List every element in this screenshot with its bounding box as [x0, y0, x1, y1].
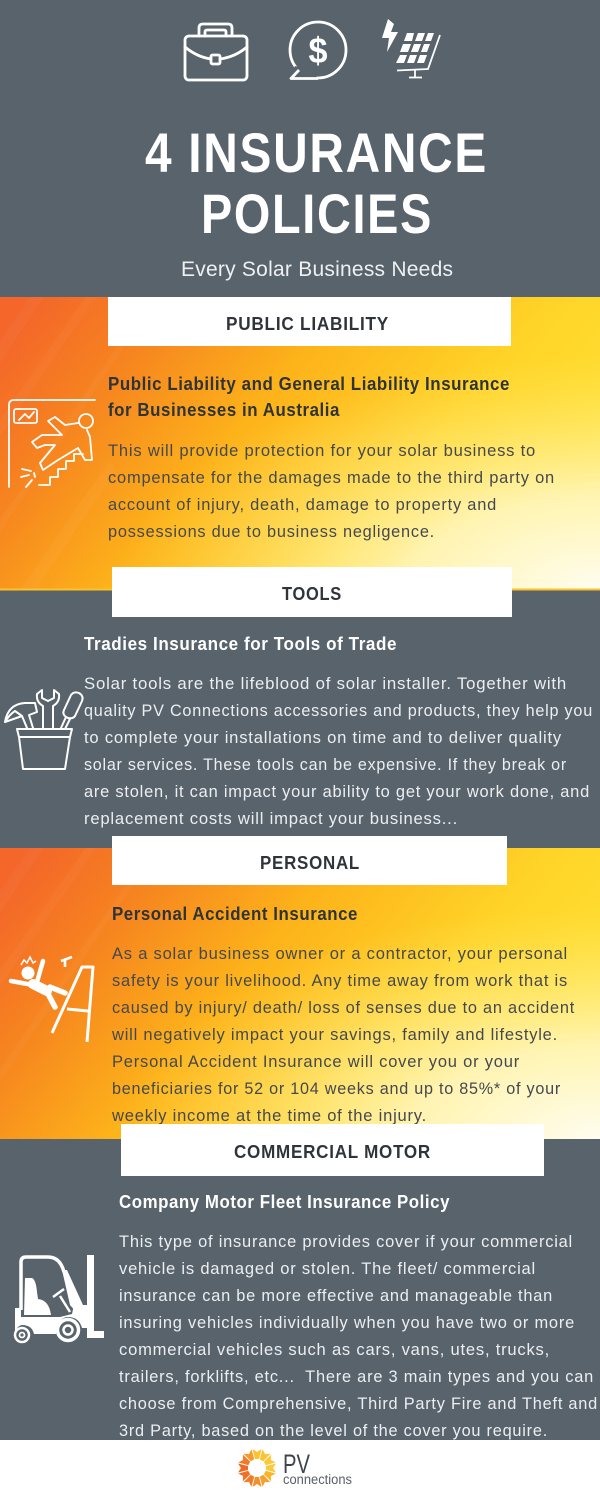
text: public liability: account of injury, death, damage to property and [108, 495, 497, 514]
title: POLICIES [201, 182, 433, 245]
text: commercial motor: 3rd Party, based on the level of the cover you require. [119, 1421, 548, 1440]
logo: PV wordmark [283, 1449, 352, 1487]
text: tools [84, 674, 593, 828]
icon: falling on stairs [9, 400, 95, 487]
label box: tools: TOOLS [282, 584, 342, 604]
heading: public liability [108, 374, 510, 420]
panel: personal [0, 836, 600, 1139]
text: commercial motor: trailers, forklifts, etc... There are 3 main types and you can [119, 1367, 594, 1386]
label box: public liability: PUBLIC LIABILITY [226, 314, 389, 334]
title: 4 INSURANCE [145, 121, 488, 184]
logo: PV wordmark: connections [283, 1472, 352, 1487]
text: personal: will negatively impact your savings, family and lifestyle. [111, 1025, 558, 1044]
icon: falling from ladder [11, 957, 93, 1042]
panel: public liability [0, 297, 600, 590]
logo: PV wordmark: PV [283, 1449, 310, 1479]
text: public liability: possessions due to business negligence. [108, 522, 435, 541]
icon: briefcase [185, 24, 247, 80]
text: personal [111, 944, 575, 1125]
text: commercial motor [119, 1232, 598, 1440]
subtitle: Every Solar Business Needs [181, 258, 453, 281]
panel: tools [5, 567, 593, 828]
text: public liability [108, 441, 555, 541]
icon: forklift [15, 1255, 104, 1342]
text: public liability: This will provide protection for your solar business to [108, 441, 536, 460]
label box: commercial motor: COMMERCIAL MOTOR [234, 1142, 431, 1162]
text: personal: Personal Accident Insurance will cover you or your [112, 1052, 520, 1071]
text: personal: caused by injury/ death/ loss of senses due to an accident [112, 998, 575, 1017]
title [145, 121, 488, 245]
text: commercial motor: vehicle is damaged or stolen. The fleet/ commercial [119, 1259, 536, 1278]
header icons [185, 19, 440, 80]
heading: commercial motor: Company Motor Fleet Insurance Policy [119, 1192, 450, 1212]
text: commercial motor: commercial vehicles such as cars, vans, utes, trucks, [119, 1340, 550, 1359]
text: tools: are stolen, it can impact your ability to get your work done, and [84, 782, 590, 801]
text: tools: to complete your installations on time and to deliver quality [84, 728, 562, 747]
text: commercial motor: insurance can be more effective and manageable than [119, 1286, 553, 1305]
icon: dollar speech bubble: $ [308, 30, 328, 71]
text: tools: solar services. These tools can be expensive. If they break or [84, 755, 567, 774]
label box: public liability [108, 297, 511, 346]
icon: solar panel with bolt [382, 19, 440, 78]
text: tools: Solar tools are the lifeblood of solar installer. Together with [84, 674, 567, 693]
icon: tool bucket [5, 690, 83, 769]
text: personal: weekly income at the time of the injury. [111, 1106, 427, 1125]
footer [0, 1440, 600, 1500]
label box: tools [112, 567, 512, 617]
text: commercial motor: insuring vehicles individually when you have two or more [119, 1313, 575, 1332]
heading: personal: Personal Accident Insurance [112, 904, 358, 924]
text: tools: replacement costs will impact your business... [84, 809, 458, 828]
logo: PV Connections sun [238, 1449, 276, 1487]
text: commercial motor: This type of insurance provides cover if your commercial [119, 1232, 573, 1251]
text: personal: beneficiaries for 52 or 104 weeks and up to 85%* of your [112, 1079, 561, 1098]
panel: commercial motor [15, 1124, 598, 1440]
label box: personal: PERSONAL [260, 853, 360, 873]
text: personal: As a solar business owner or a contractor, your personal [112, 944, 568, 963]
text: public liability: compensate for the damages made to the third party on [108, 468, 555, 487]
heading: tools: Tradies Insurance for Tools of Trade [84, 634, 397, 654]
heading: public liability: Public Liability and General Liability Insurance [108, 374, 510, 394]
heading: public liability: for Businesses in Australia [108, 400, 340, 420]
label box: personal [112, 836, 507, 885]
icon: dollar speech bubble [290, 22, 346, 78]
text: personal: safety is your livelihood. Any time away from work that is [112, 971, 568, 990]
label box: commercial motor [121, 1124, 544, 1176]
